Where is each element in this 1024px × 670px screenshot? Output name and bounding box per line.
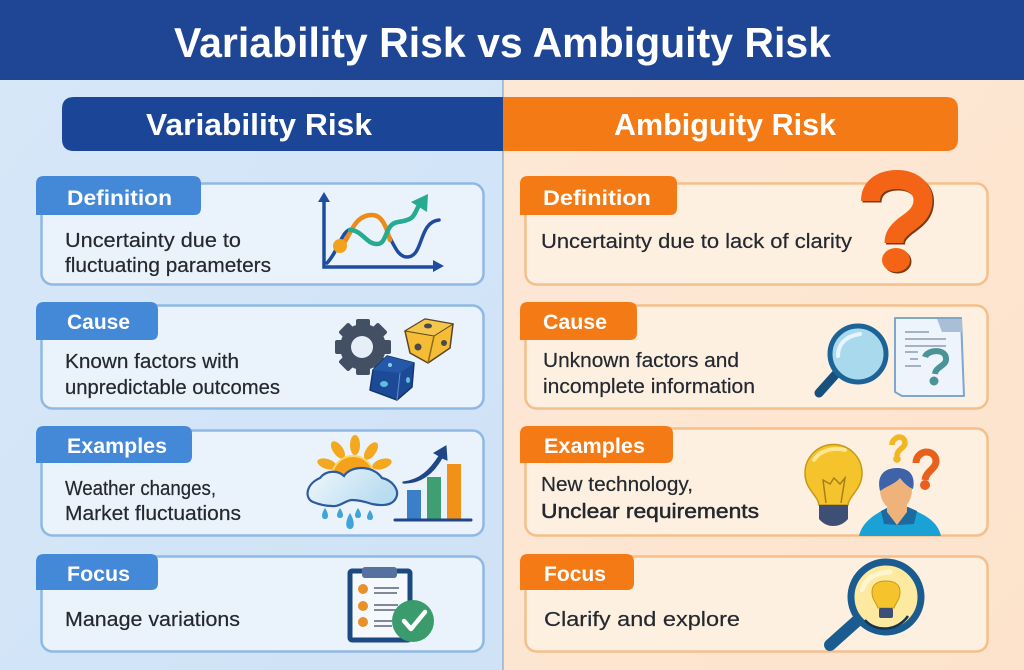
tab: Cause: Cause bbox=[543, 311, 607, 334]
icon: clipboard with check bbox=[350, 567, 434, 642]
tab: Focus: Focus bbox=[67, 563, 130, 586]
column heading: Variability Risk bbox=[62, 97, 503, 151]
text: examples body: Unclear requirements bbox=[541, 501, 759, 523]
text: focus body: Clarify and explore bbox=[544, 609, 740, 631]
title: Variability Risk vs Ambiguity Risk bbox=[174, 19, 832, 66]
tab: Examples bbox=[520, 426, 673, 463]
text: cause body: unpredictable outcomes bbox=[65, 377, 280, 399]
text: cause body: Unknown factors and bbox=[543, 350, 739, 372]
text: cause body: Known factors with bbox=[65, 351, 239, 373]
text: cause body bbox=[65, 351, 280, 399]
panel: ambiguity examples bbox=[520, 426, 988, 536]
icon: weather and rising bars bbox=[308, 435, 471, 529]
panel: variability examples bbox=[36, 426, 484, 536]
tab: Definition bbox=[520, 176, 677, 215]
panel: ambiguity focus bbox=[520, 554, 988, 652]
column heading: Ambiguity Risk bbox=[503, 97, 958, 151]
text: examples body: Market fluctuations bbox=[65, 503, 241, 525]
text: cause body bbox=[543, 350, 755, 398]
icon: question mark bbox=[870, 180, 924, 274]
tab: Examples: Examples bbox=[67, 435, 167, 458]
panel: variability definition bbox=[36, 176, 484, 284]
panel: variability cause bbox=[36, 302, 484, 408]
title bar bbox=[0, 0, 1024, 80]
tab: Examples bbox=[36, 426, 192, 463]
text: examples body: Weather changes, bbox=[65, 478, 216, 500]
text: definition body bbox=[65, 230, 271, 277]
icon: magnifier with light bulb bbox=[830, 562, 921, 645]
panel: ambiguity definition bbox=[520, 176, 988, 284]
tab: Focus: Focus bbox=[544, 563, 606, 586]
panel: variability focus bbox=[36, 554, 484, 652]
tab: Examples: Examples bbox=[544, 435, 645, 458]
tab: Cause bbox=[36, 302, 158, 340]
tab: Definition: Definition bbox=[67, 187, 172, 210]
text: focus body: Manage variations bbox=[65, 609, 240, 631]
icon: gear and dice bbox=[335, 319, 453, 400]
text: examples body: New technology, bbox=[541, 474, 693, 496]
text: examples body bbox=[541, 474, 759, 523]
panel background: ambiguity side bbox=[503, 80, 1024, 670]
tab: Definition: Definition bbox=[543, 187, 651, 210]
tab: Cause: Cause bbox=[67, 311, 130, 334]
tab: Definition bbox=[36, 176, 201, 215]
tab: Cause bbox=[520, 302, 637, 340]
icon: line chart bbox=[318, 192, 444, 272]
tab: Focus bbox=[36, 554, 158, 590]
text: definition body: Uncertainty due to lack of clarity bbox=[541, 231, 852, 253]
column heading: Ambiguity Risk: Ambiguity Risk bbox=[614, 107, 837, 142]
text: cause body: incomplete information bbox=[543, 376, 755, 398]
column heading: Variability Risk: Variability Risk bbox=[146, 107, 373, 142]
panel background: variability side bbox=[0, 80, 503, 670]
text: definition body: fluctuating parameters bbox=[65, 255, 271, 277]
icon: light bulb and confused person bbox=[805, 437, 941, 536]
text: examples body bbox=[65, 478, 241, 525]
panel: ambiguity cause bbox=[520, 302, 988, 408]
text: definition body: Uncertainty due to bbox=[65, 230, 241, 252]
tab: Focus bbox=[520, 554, 634, 590]
icon: magnifier and document bbox=[819, 318, 964, 396]
